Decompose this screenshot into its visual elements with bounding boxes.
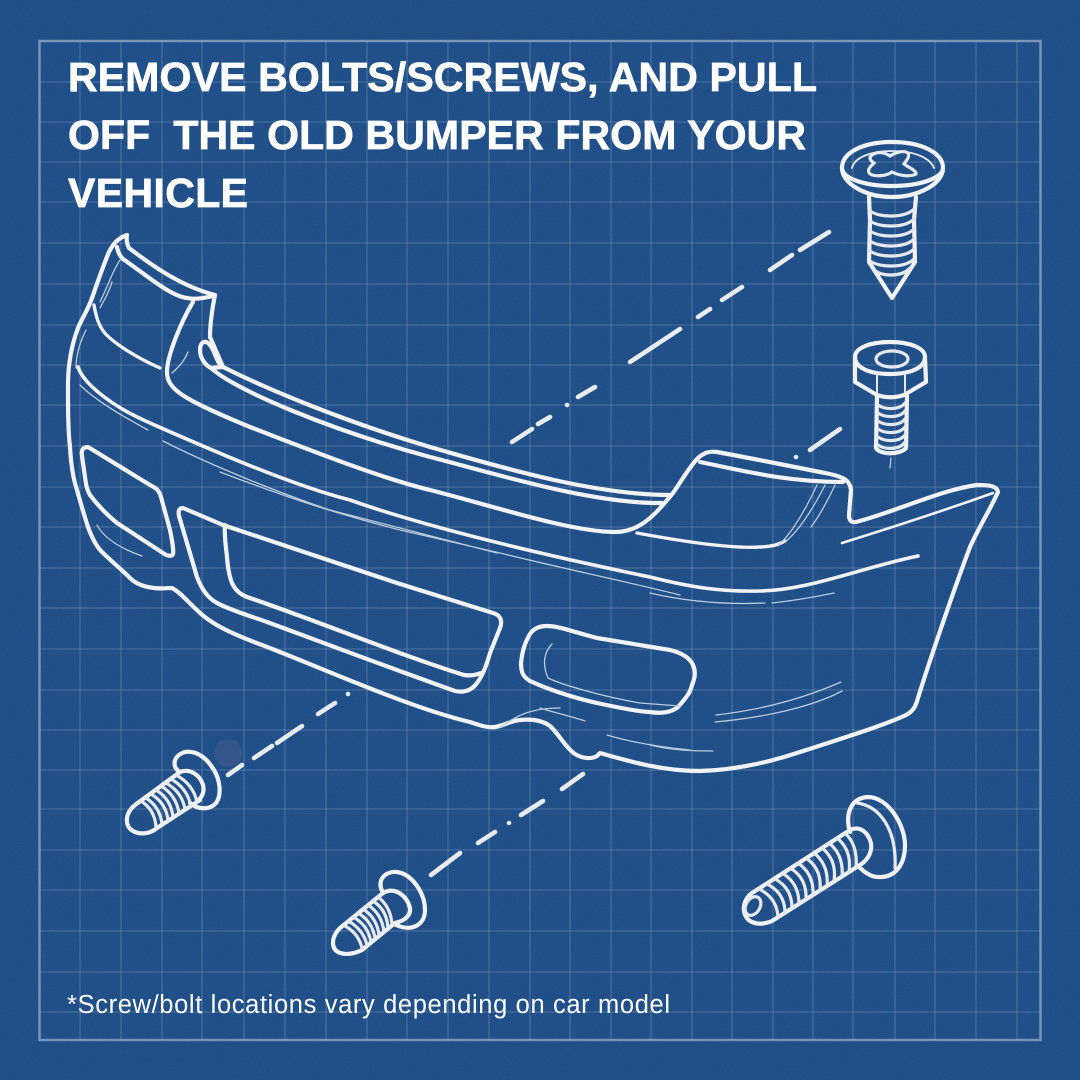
fine highlights [76, 260, 842, 751]
fog light recess [521, 626, 695, 713]
central grille inner [225, 525, 481, 675]
left side crease [94, 305, 160, 368]
footnote: *Screw/bolt locations vary depending on car model [67, 991, 670, 1019]
bumper upper rim lines [127, 235, 670, 495]
left vent [82, 447, 173, 556]
tab lower edge [637, 533, 785, 547]
bumper outer outline [68, 235, 998, 771]
title: REMOVE BOLTS/SCREWS, AND PULL [68, 54, 817, 100]
icon: centre screw [333, 872, 425, 954]
title [68, 54, 817, 216]
arrow: dashed line centre screw to bumper [431, 774, 583, 875]
arrow: dashed line top screw to bumper [512, 232, 829, 442]
arrow: dashed line hex bolt to bumper [796, 429, 840, 457]
illustration: car bumper [68, 235, 998, 771]
tab corner line [700, 462, 843, 482]
title: VEHICLE [68, 170, 248, 216]
main body crease [78, 367, 918, 591]
arrow: dashed line left screw to bumper [228, 694, 348, 775]
icon: left screw [127, 739, 242, 833]
cross recess [869, 152, 916, 176]
icon: hex bolt [855, 342, 926, 468]
icon: top pan-head screw [842, 142, 943, 298]
icon: large screw [742, 797, 905, 924]
central grille outer [179, 508, 501, 692]
title: OFF THE OLD BUMPER FROM YOUR [68, 112, 806, 158]
